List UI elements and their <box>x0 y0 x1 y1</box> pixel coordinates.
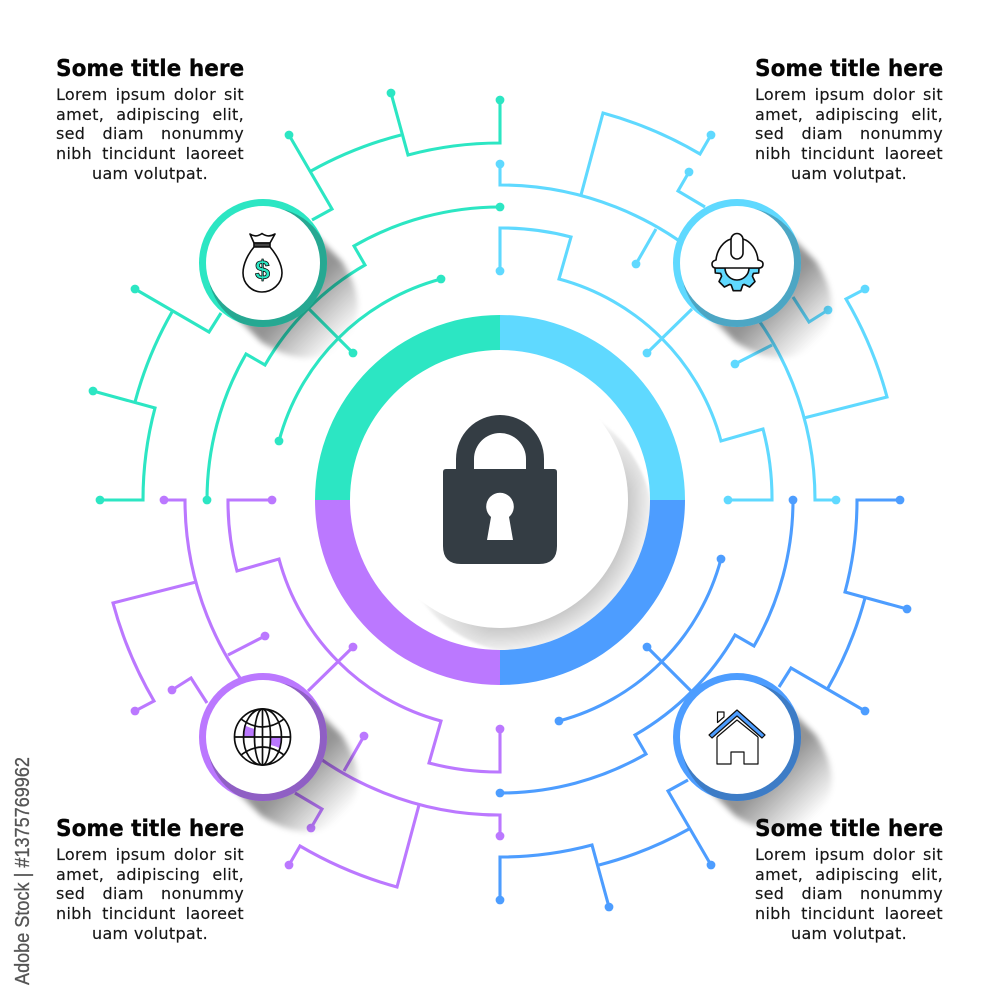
body: top right <box>755 85 943 183</box>
body: top right: amet, adipiscing elit, <box>755 105 943 124</box>
body: bottom left: uam volutpat. <box>92 924 208 943</box>
title: top right: Some title here <box>755 56 943 82</box>
icon: house <box>709 710 765 764</box>
long shadow <box>223 223 383 383</box>
ring shade <box>682 682 804 804</box>
title: bottom left: Some title here <box>56 816 244 842</box>
node disc <box>680 680 794 794</box>
node disc <box>680 206 794 320</box>
node ring <box>199 199 327 327</box>
title: top left: Some title here <box>56 56 244 82</box>
icon: money bag <box>243 234 282 292</box>
ring segment: cyan <box>500 315 685 500</box>
node: cyan helmet <box>673 199 833 359</box>
ring shade <box>208 682 330 804</box>
body: top left <box>56 85 244 183</box>
node ring <box>673 199 801 327</box>
node: purple globe <box>199 673 359 833</box>
body: top left: sed diam nonummy <box>56 124 244 143</box>
icon: money bag: $ <box>255 255 270 285</box>
body: bottom left: Lorem ipsum dolor sit <box>56 845 244 864</box>
node: teal money <box>199 199 359 359</box>
body: top right: nibh tincidunt laoreet <box>755 144 943 163</box>
ring shade <box>208 208 330 330</box>
body: bottom left: sed diam nonummy <box>56 884 244 903</box>
body: bottom right <box>755 845 943 943</box>
hub shadow <box>426 426 650 650</box>
body: bottom right: nibh tincidunt laoreet <box>755 904 943 923</box>
title: bottom right: Some title here <box>755 816 943 842</box>
ring shade <box>682 208 804 330</box>
node: blue house <box>673 673 833 833</box>
circuit lines: purple quadrant <box>113 496 504 887</box>
ring segment: teal <box>315 315 500 500</box>
body: top right: sed diam nonummy <box>755 124 943 143</box>
circuit lines: teal quadrant <box>89 89 504 504</box>
body: top right: uam volutpat. <box>791 164 907 183</box>
icon: padlock <box>443 415 557 564</box>
body: bottom right: Lorem ipsum dolor sit <box>755 845 943 864</box>
node ring <box>199 673 327 801</box>
body: top left: uam volutpat. <box>92 164 208 183</box>
body: bottom right: amet, adipiscing elit, <box>755 865 943 884</box>
long shadow <box>697 223 857 383</box>
node disc <box>206 680 320 794</box>
text block: bottom right <box>755 816 943 943</box>
node ring <box>673 673 801 801</box>
body: top left: nibh tincidunt laoreet <box>56 144 244 163</box>
stock id text: Adobe Stock | #1375769962 <box>12 757 34 985</box>
text block: top right <box>755 56 943 183</box>
circuit lines: cyan quadrant <box>496 113 887 504</box>
body: bottom right: sed diam nonummy <box>755 884 943 903</box>
circuit lines: blue quadrant <box>496 496 911 911</box>
body: bottom left <box>56 845 244 943</box>
long shadow <box>223 697 383 857</box>
body: top left: Lorem ipsum dolor sit <box>56 85 244 104</box>
icon: helmet with gear <box>712 234 763 291</box>
node disc <box>206 206 320 320</box>
long shadow <box>697 697 857 857</box>
body: bottom left: amet, adipiscing elit, <box>56 865 244 884</box>
text block: bottom left <box>56 816 244 943</box>
ring segment: blue <box>500 500 685 685</box>
ring segment: purple <box>315 500 500 685</box>
body: bottom left: nibh tincidunt laoreet <box>56 904 244 923</box>
body: top left: amet, adipiscing elit, <box>56 105 244 124</box>
body: top right: Lorem ipsum dolor sit <box>755 85 943 104</box>
hub disc <box>372 372 628 628</box>
central hub <box>315 315 685 685</box>
icon: globe <box>234 709 290 765</box>
body: bottom right: uam volutpat. <box>791 924 907 943</box>
text block: top left <box>56 56 244 183</box>
